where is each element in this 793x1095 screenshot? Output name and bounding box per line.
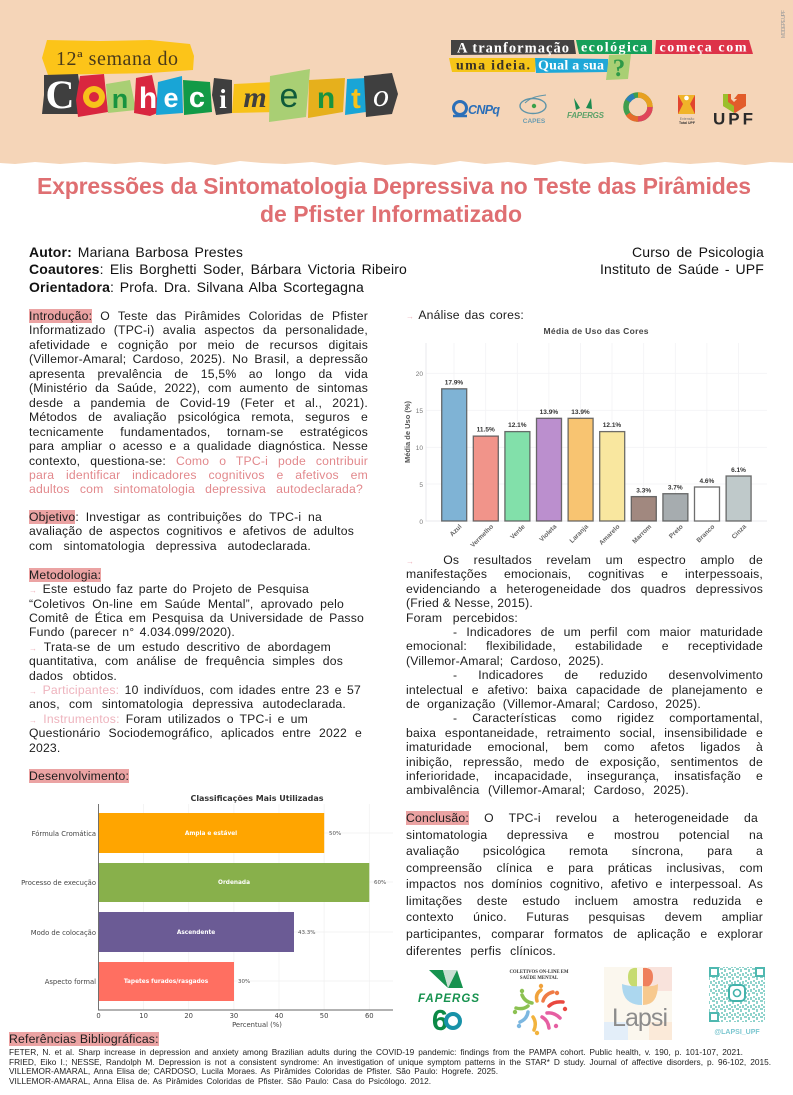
y axis xyxy=(416,371,423,526)
category labels xyxy=(449,523,748,549)
section: resultados: de organização (Villemor-Amaral; Cardoso, 2025). xyxy=(406,697,701,711)
bar: processo de execucao: Ordenada xyxy=(218,880,250,886)
bar: formula cromatica: 50% xyxy=(329,831,341,837)
value ticks: 30 xyxy=(230,1012,238,1020)
bars xyxy=(442,389,751,521)
value ticks xyxy=(96,1012,374,1020)
logo: FAPERGS: FAPERGS xyxy=(567,111,605,120)
logo: coletivos on-line em saude mental: SAÚDE MENTAL xyxy=(520,975,558,981)
bar: processo de execucao: 60% xyxy=(374,880,386,886)
logo: FAPERGS xyxy=(567,98,605,120)
data labels: 3.7% xyxy=(668,484,683,492)
section: resultados: - Indicadores de reduzido desenvolvimento xyxy=(453,668,763,682)
category labels: Marrom xyxy=(631,523,653,545)
tag: 12a semana do xyxy=(42,40,194,75)
axes xyxy=(98,804,393,1010)
logo: CNPq xyxy=(453,102,500,117)
logo: coletivos on-line em saude mental: COLETIVOS ON-LINE EM xyxy=(509,970,569,975)
word: Conhecimento in cut-out letters: n xyxy=(112,84,128,114)
data labels: 3.3% xyxy=(636,488,651,494)
references list: FETER, N. et al. Sharp increase in depression and anxiety among Brazilian adults during the COVID-19 pandemic: findings from the PAMPA cohort. Public health, v. 190, p. 101-107, 2021. xyxy=(9,1047,743,1057)
section: conclusao: Conclusão: O TPC-i revelou a heterogeneidade da xyxy=(406,811,758,825)
category labels: Processo de execução xyxy=(21,879,96,887)
section: introducao: Métodos de avaliação psicológica remota, seguros e xyxy=(29,410,368,424)
word: Conhecimento in cut-out letters: i xyxy=(219,84,227,114)
section: introducao: desde a pandemia de Covid-19 (Feter et al., 2021). xyxy=(29,396,368,410)
word: Conhecimento in cut-out letters: m xyxy=(243,81,267,114)
category labels xyxy=(21,830,96,986)
heading: desenvolvimento: Desenvolvimento: xyxy=(29,769,129,783)
x axis label: Percentual (%) xyxy=(232,1021,282,1029)
word: Conhecimento in cut-out letters: c xyxy=(189,82,205,114)
word: Conhecimento in cut-out letters: h xyxy=(139,82,157,115)
word: Conhecimento in cut-out letters xyxy=(42,69,398,122)
bar: aspecto formal: 30% xyxy=(238,979,250,985)
value ticks: 40 xyxy=(275,1012,283,1020)
category labels: Cinza xyxy=(731,523,748,541)
bar: formula cromatica: Ampla e estável xyxy=(185,830,237,837)
category labels: Laranja xyxy=(569,523,590,545)
logo: CAPES: CAPES xyxy=(523,118,546,125)
course block: Curso de Psicologia xyxy=(632,244,764,260)
title: Expressões da Sintomatologia Depressiva no Teste das Pirâmides xyxy=(37,173,751,199)
data labels: 11.5% xyxy=(477,426,495,434)
data labels: 4.6% xyxy=(699,478,715,485)
bar: modo de colocacao: 43.3% xyxy=(298,930,315,936)
authors block: Autor: Mariana Barbosa Prestes xyxy=(29,244,243,260)
slogan banner: ecológica xyxy=(581,40,647,56)
section: metodologia: 2023. xyxy=(29,741,60,755)
logo: ODS ring xyxy=(626,95,650,119)
data labels xyxy=(445,380,746,494)
authors block: Coautores: Elis Borghetti Soder, Bárbara Victoria Ribeiro xyxy=(29,261,407,277)
bar chart: media de uso das cores: Média de Uso (%) xyxy=(403,400,412,463)
section: metodologia xyxy=(29,568,364,755)
slogan banner: ? xyxy=(613,55,625,82)
logo: extensao: Total UPF xyxy=(679,121,696,125)
word: Conhecimento in cut-out letters: e xyxy=(280,77,298,115)
section: introducao: para ampliar o acesso e a qualidade diagnóstica. Nesse xyxy=(29,439,368,453)
section: metodologia: Metodologia: xyxy=(29,568,101,582)
section: resultados: - Características como rigidez comportamental, xyxy=(453,711,763,725)
category labels: Amarelo xyxy=(598,523,621,547)
section: resultados: → Os resultados revelam um espectro amplo de xyxy=(406,553,763,567)
course block xyxy=(600,244,764,277)
word: Conhecimento in cut-out letters: e xyxy=(163,83,179,113)
section: resultados: ambivalência (Villemor-Amaral; Cardoso, 2025). xyxy=(406,783,689,797)
section: resultados: inibição, repressão, medo de exposição, sentimentos de xyxy=(406,755,763,769)
section: introducao: Informatizado (TPC-i) avalia aspectos da personalidade, xyxy=(29,323,368,337)
QR code: @LAPSI_UPF: @LAPSI_UPF xyxy=(714,1029,760,1036)
title xyxy=(37,173,751,227)
section: metodologia: Fundo (parecer n° 4.034.099/2020). xyxy=(29,625,235,639)
category labels: Verde xyxy=(509,523,527,541)
bar: aspecto formal: Tapetes furados/rasgados xyxy=(124,979,209,985)
category labels: Vermelho xyxy=(469,523,495,549)
logo: UPF xyxy=(713,94,753,128)
logo: CAPES xyxy=(520,95,546,125)
section: introducao: adultos com sintomatologia depressiva autodeclarada? xyxy=(29,482,363,496)
data labels: 12.1% xyxy=(508,422,527,429)
bar chart: classificacoes mais utilizadas xyxy=(21,794,393,1029)
logo: coletivos on-line em saude mental xyxy=(509,970,569,1036)
section: resultados: baixa espontaneidade, retraimento social, insensibilidade e xyxy=(406,726,763,740)
y axis: 0 xyxy=(419,519,423,526)
logo: Lapsi: Lapsi xyxy=(612,1004,668,1032)
category labels: Aspecto formal xyxy=(45,978,96,986)
logo: CNPq: CNPq xyxy=(468,103,500,117)
value ticks: 60 xyxy=(365,1012,374,1020)
section: metodologia: “Coletivos On-line em Saúde Mental”, aprovado pelo xyxy=(29,597,344,611)
tag: 12a semana do: 12ª semana do xyxy=(56,48,178,70)
section: objetivo: avaliação de aspectos cognitivos e afetivos de adultos xyxy=(29,524,354,538)
side code: MODEPE.UPF xyxy=(781,10,787,38)
logo: extensao xyxy=(678,95,696,125)
section: metodologia: → Trata-se de um estudo descritivo de abordagem xyxy=(29,640,331,654)
bar: processo de execucao xyxy=(98,863,386,902)
authors block xyxy=(29,244,407,295)
section: resultados: (Villemor-Amaral; Cardoso, 2025). xyxy=(406,654,604,668)
section: objetivo: Objetivo: Investigar as contribuições do TPC-i na xyxy=(29,510,322,524)
category labels: Preto xyxy=(668,523,685,540)
section: objetivo: com sintomatologia depressiva autodeclarada. xyxy=(29,539,311,553)
logo: 12a semana do Conhecimento xyxy=(42,40,398,122)
section: resultados: (Fried & Nesse, 2015). xyxy=(406,596,533,610)
y axis: 5 xyxy=(419,482,423,489)
category labels: Branco xyxy=(696,523,716,544)
section: objetivo xyxy=(29,510,354,553)
section: metodologia: Questionário Sociodemográfico, aplicados entre 2022 e xyxy=(29,726,362,740)
section: resultados xyxy=(406,553,763,797)
value ticks: 20 xyxy=(184,1012,193,1020)
word: Conhecimento in cut-out letters: C xyxy=(46,72,74,117)
section: conclusao: contexto único. Futuras pesquisas devem ampliar xyxy=(406,910,763,924)
section: metodologia: → Participantes: 10 indivíduos, com idades entre 23 e 57 xyxy=(29,683,361,697)
section: introducao: (Ministério da Saúde, 2022), com aumento de sintomas xyxy=(29,381,368,395)
section: conclusao: impactos nos domínios cognitivo, afetivo e interpessoal. As xyxy=(406,877,763,891)
section: conclusao: participantes, comparar formatos de aplicação e explorar xyxy=(406,927,763,941)
section: introducao: Introdução: O Teste das Pirâmides Coloridas de Pfister xyxy=(29,309,368,323)
data labels: 13.9% xyxy=(540,409,558,416)
data labels: 13.9% xyxy=(571,409,590,416)
section: resultados: inferioridade, incapacidade, insegurança, insatisfação e xyxy=(406,769,763,783)
section: introducao xyxy=(29,309,368,496)
title: de Pfister Informatizado xyxy=(260,201,522,227)
slogan banner xyxy=(449,40,753,82)
logo: extensao: Extensão xyxy=(680,117,694,121)
slogan banner: começa com xyxy=(660,40,747,56)
logo: FAPERGS 60 anos: FAPERGS xyxy=(418,993,479,1005)
references list: VILLEMOR-AMARAL, Anna Elisa de. As Pirâmides Coloridas de Pfister. São Paulo: Casa do Psicólogo. 2012. xyxy=(9,1076,431,1086)
data labels: 6.1% xyxy=(731,467,746,474)
section: metodologia: Comitê de Ética em Pesquisa da Universidade de Passo xyxy=(29,611,364,625)
logo: Lapsi xyxy=(604,967,672,1040)
chart title: Classificações Mais Utilizadas xyxy=(190,794,324,803)
section: conclusao: limitações deste estudo incluem amostra reduzida e xyxy=(406,894,763,908)
word: Conhecimento in cut-out letters: o xyxy=(373,77,389,113)
sponsor logos row xyxy=(452,92,753,128)
slogan banner: Qual a sua xyxy=(538,58,604,74)
bar: modo de colocacao xyxy=(98,912,315,952)
section: introducao: (Villemor-Amaral; Cardoso, 2025). No Brasil, a depressão xyxy=(29,352,368,366)
section: resultados: evidenciando a heterogeneidade dos quadros depressivos xyxy=(406,582,763,596)
y axis: 20 xyxy=(416,371,423,378)
bar: formula cromatica xyxy=(98,813,341,853)
data labels: 17.9% xyxy=(445,380,463,386)
references list xyxy=(9,1047,771,1086)
logo: UPF: UPF xyxy=(713,110,753,128)
header band xyxy=(0,0,793,165)
authors block: Orientadora: Profa. Dra. Silvana Alba Scortegagna xyxy=(29,279,364,295)
section: metodologia: → Este estudo faz parte do Projeto de Pesquisa xyxy=(29,582,309,596)
section: metodologia: quantitativa, com análise de frequência simples dos xyxy=(29,654,343,668)
word: Conhecimento in cut-out letters: n xyxy=(317,82,335,115)
section: resultados: emocional: flexibilidade, estabilidade e receptividade xyxy=(406,639,763,653)
section: metodologia: dados obtidos. xyxy=(29,669,117,683)
section: resultados: - Indicadores de um perfil com maior maturidade xyxy=(453,625,763,639)
value ticks: 0 xyxy=(96,1012,101,1020)
analise das cores label: → Análise das cores: xyxy=(406,308,524,322)
value ticks: 10 xyxy=(139,1012,148,1020)
section: resultados: imaturidade emocional, bem como afetos ligados à xyxy=(406,740,763,754)
section: introducao: para identificar indicadores cognitivos e afetivos em xyxy=(29,468,368,482)
section: introducao: tecnicamente fundamentados, tornam-se estratégicos xyxy=(29,425,368,439)
heading: referencias: Referências Bibliográficas: xyxy=(9,1032,159,1046)
section: introducao: contexto, questiona-se: Como o TPC-i pode contribuir xyxy=(29,454,368,468)
category labels: Fórmula Cromática xyxy=(32,830,96,838)
section: conclusao xyxy=(406,811,763,958)
bar: modo de colocacao: Ascendente xyxy=(177,930,215,936)
QR code: @LAPSI_UPF xyxy=(709,967,765,1036)
section: resultados: Foram percebidos: xyxy=(406,611,518,625)
section: introducao: afetividade e cognição por meio de recursos digitais xyxy=(29,338,368,352)
value ticks: 50 xyxy=(320,1012,328,1020)
section: conclusao: avaliação psicológica remota síncrona, para a xyxy=(406,844,763,858)
word: Conhecimento in cut-out letters: t xyxy=(351,83,361,115)
section: introducao: apresenta prevalência de 15,5% ao longo da vida xyxy=(29,367,368,381)
course block: Instituto de Saúde - UPF xyxy=(600,261,764,277)
bar: aspecto formal xyxy=(98,962,250,1001)
section: conclusao: diferentes perfis clínicos. xyxy=(406,944,556,958)
y axis: 15 xyxy=(416,408,423,415)
section: metodologia: anos, com sintomatologia depressiva autodeclarada. xyxy=(29,697,346,711)
bar chart: media de uso das cores xyxy=(403,326,767,549)
data labels: 12.1% xyxy=(603,422,621,429)
section: metodologia: → Instrumentos: Foram utilizados o TPC-i e um xyxy=(29,712,308,726)
slogan banner: A tranformação xyxy=(457,40,569,56)
section: resultados: manifestações emocionais, cognitivas e interpessoais, xyxy=(406,567,763,581)
slogan banner: uma ideia. xyxy=(456,58,530,74)
section: resultados: intelectual e afetivo: baixa capacidade de planejamento e xyxy=(406,683,763,697)
category labels: Modo de colocação xyxy=(31,929,96,937)
logo: FAPERGS 60 anos: 6 xyxy=(432,1005,448,1037)
references list: VILLEMOR-AMARAL, Anna Elisa de; CARDOSO, Lucila Moraes. As Pirâmides Coloridas de Pfister. São Paulo: Hogrefe. 2025. xyxy=(9,1066,498,1076)
category labels: Violeta xyxy=(538,523,559,543)
chart title: Média de Uso das Cores xyxy=(544,326,649,336)
section: conclusao: sintomatologia depressiva e mostrou potencial na xyxy=(406,828,763,842)
y axis: 10 xyxy=(416,445,423,452)
category labels: Azul xyxy=(449,523,464,538)
logo: FAPERGS 60 anos xyxy=(418,970,479,1037)
section: conclusao: compreensão clínica e para práticas inclusivas, com xyxy=(406,861,763,875)
references list: FRIED, Eiko I.; NESSE, Randolph M. Depression is not a consistent syndrome: An investigation of unique symptom patterns in the STAR* D study. Journal of affective disorders, p. 96-102, 2015. xyxy=(9,1057,771,1067)
